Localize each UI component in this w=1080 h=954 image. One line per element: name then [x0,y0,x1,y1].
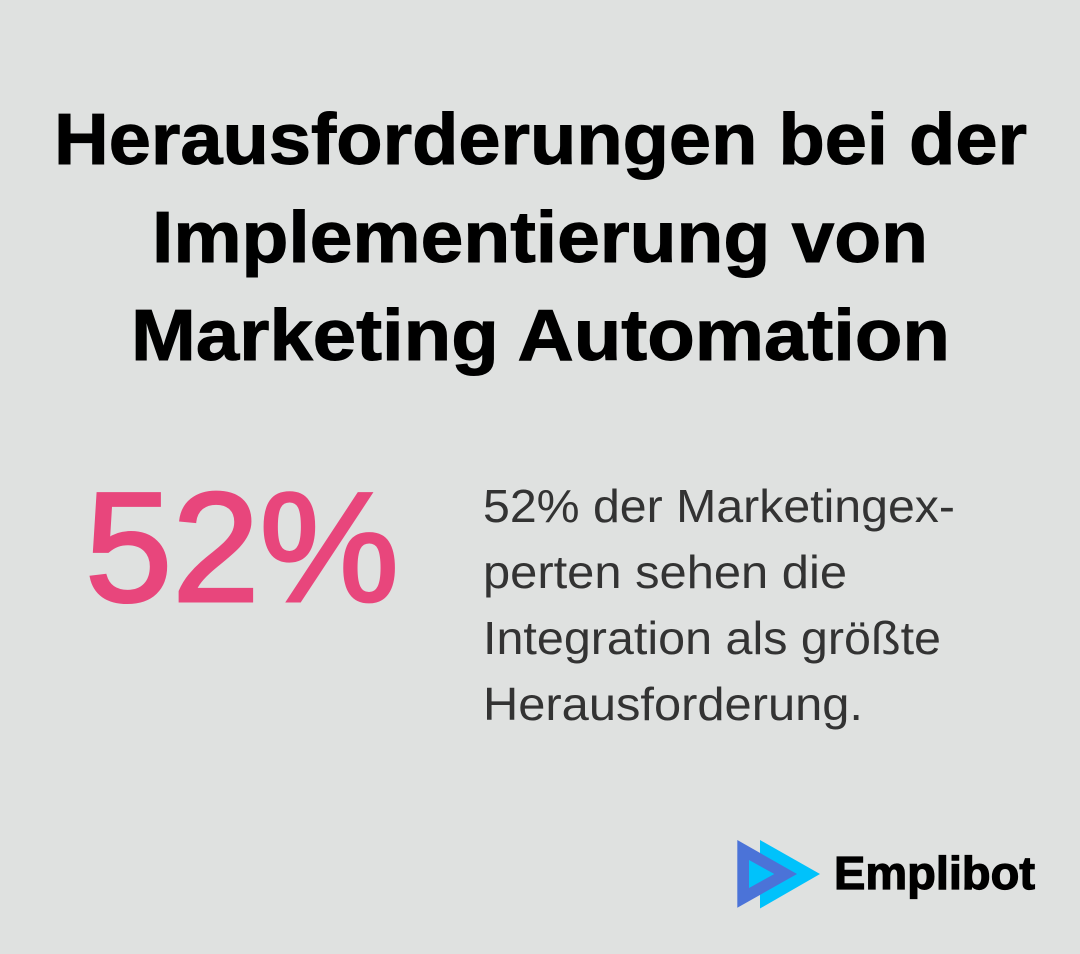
description text: Herausforderung. [483,678,863,730]
title: Herausforderungen bei der [54,100,1027,180]
description text: Integration als größte [483,612,941,664]
title: Marketing Automation [131,296,950,376]
description text: perten sehen die [483,546,847,598]
description text [483,480,955,730]
icon: play triangles [737,840,820,908]
title [54,100,1027,376]
big statistic: 52%: 52% [85,461,399,635]
Emplibot logo [737,840,1035,908]
title: Implementierung von [152,198,928,278]
logo wordmark: Emplibot [834,847,1035,899]
description text: 52% der Marketingex- [483,480,955,532]
